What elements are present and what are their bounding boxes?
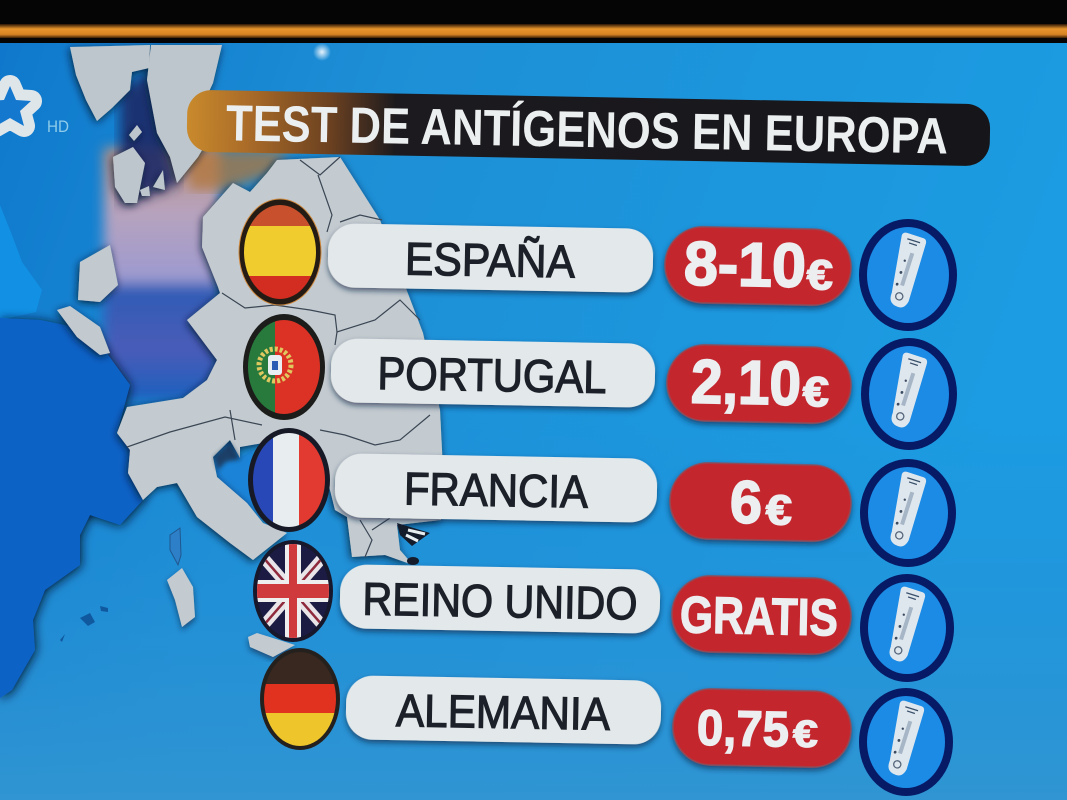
map: Adriatic coast shadow xyxy=(214,443,240,470)
icon: antigen test in circle xyxy=(864,463,952,563)
row: Portugal xyxy=(243,314,953,446)
country label pill: FRANCIA xyxy=(404,462,589,518)
map: Sardinia and Corsica xyxy=(167,528,195,627)
map: Sicily xyxy=(248,633,295,657)
logo: channel star with HD mark: HD xyxy=(47,117,69,136)
map: Adriatic sea xyxy=(213,441,265,522)
price pill xyxy=(672,688,852,768)
price pill: € xyxy=(802,368,829,415)
row: Alemania xyxy=(260,648,949,792)
price pill: € xyxy=(765,486,792,534)
logo: channel star with HD mark xyxy=(0,86,69,136)
map: Greek peninsula xyxy=(397,523,430,565)
icon: antigen test in circle xyxy=(863,692,949,792)
map: United Kingdom xyxy=(0,205,42,320)
map: Scandinavia and Denmark xyxy=(70,45,222,203)
price pill: € xyxy=(792,714,818,756)
row: Francia xyxy=(248,428,952,563)
country label pill: PORTUGAL xyxy=(377,347,607,403)
country label pill xyxy=(334,453,658,523)
price pill xyxy=(666,344,852,424)
map of Europe xyxy=(0,45,443,698)
price pill xyxy=(671,575,852,655)
country label pill xyxy=(345,675,662,745)
icon: antigen test in circle xyxy=(865,342,953,446)
price pill: 6 xyxy=(729,468,763,536)
map: dark blue peninsula xyxy=(0,318,143,698)
price pill xyxy=(664,226,852,306)
flag: Germany xyxy=(260,648,340,751)
flag: Portugal xyxy=(243,314,325,420)
price pill: 8-10 xyxy=(683,229,807,301)
country label pill: REINO UNIDO xyxy=(362,573,638,629)
price pill: 0,75 xyxy=(696,700,790,758)
map: Balearic islands xyxy=(60,606,108,642)
price pill xyxy=(669,462,852,542)
title text: TEST DE ANTÍGENOS EN EUROPA xyxy=(226,94,948,165)
price pill: 2,10 xyxy=(690,348,802,419)
row: Reino Unido xyxy=(253,540,950,678)
country label pill xyxy=(330,338,656,408)
country label pill xyxy=(327,223,654,293)
icon: antigen test in circle xyxy=(864,578,950,678)
map: continental Europe xyxy=(117,157,443,565)
country label pill: ALEMANIA xyxy=(396,684,611,740)
flag: Spain xyxy=(239,199,321,306)
flag: United Kingdom xyxy=(253,540,333,642)
map: Low Countries xyxy=(57,245,118,355)
flag: France xyxy=(248,428,331,532)
icon: antigen test in circle xyxy=(863,223,953,327)
map: window reflection area xyxy=(104,70,290,400)
country label pill: ESPAÑA xyxy=(405,233,576,287)
row: España xyxy=(239,199,953,327)
price pill: € xyxy=(806,251,833,299)
title banner xyxy=(186,90,991,166)
map: country borders xyxy=(127,157,430,557)
price pill: GRATIS xyxy=(679,586,839,648)
